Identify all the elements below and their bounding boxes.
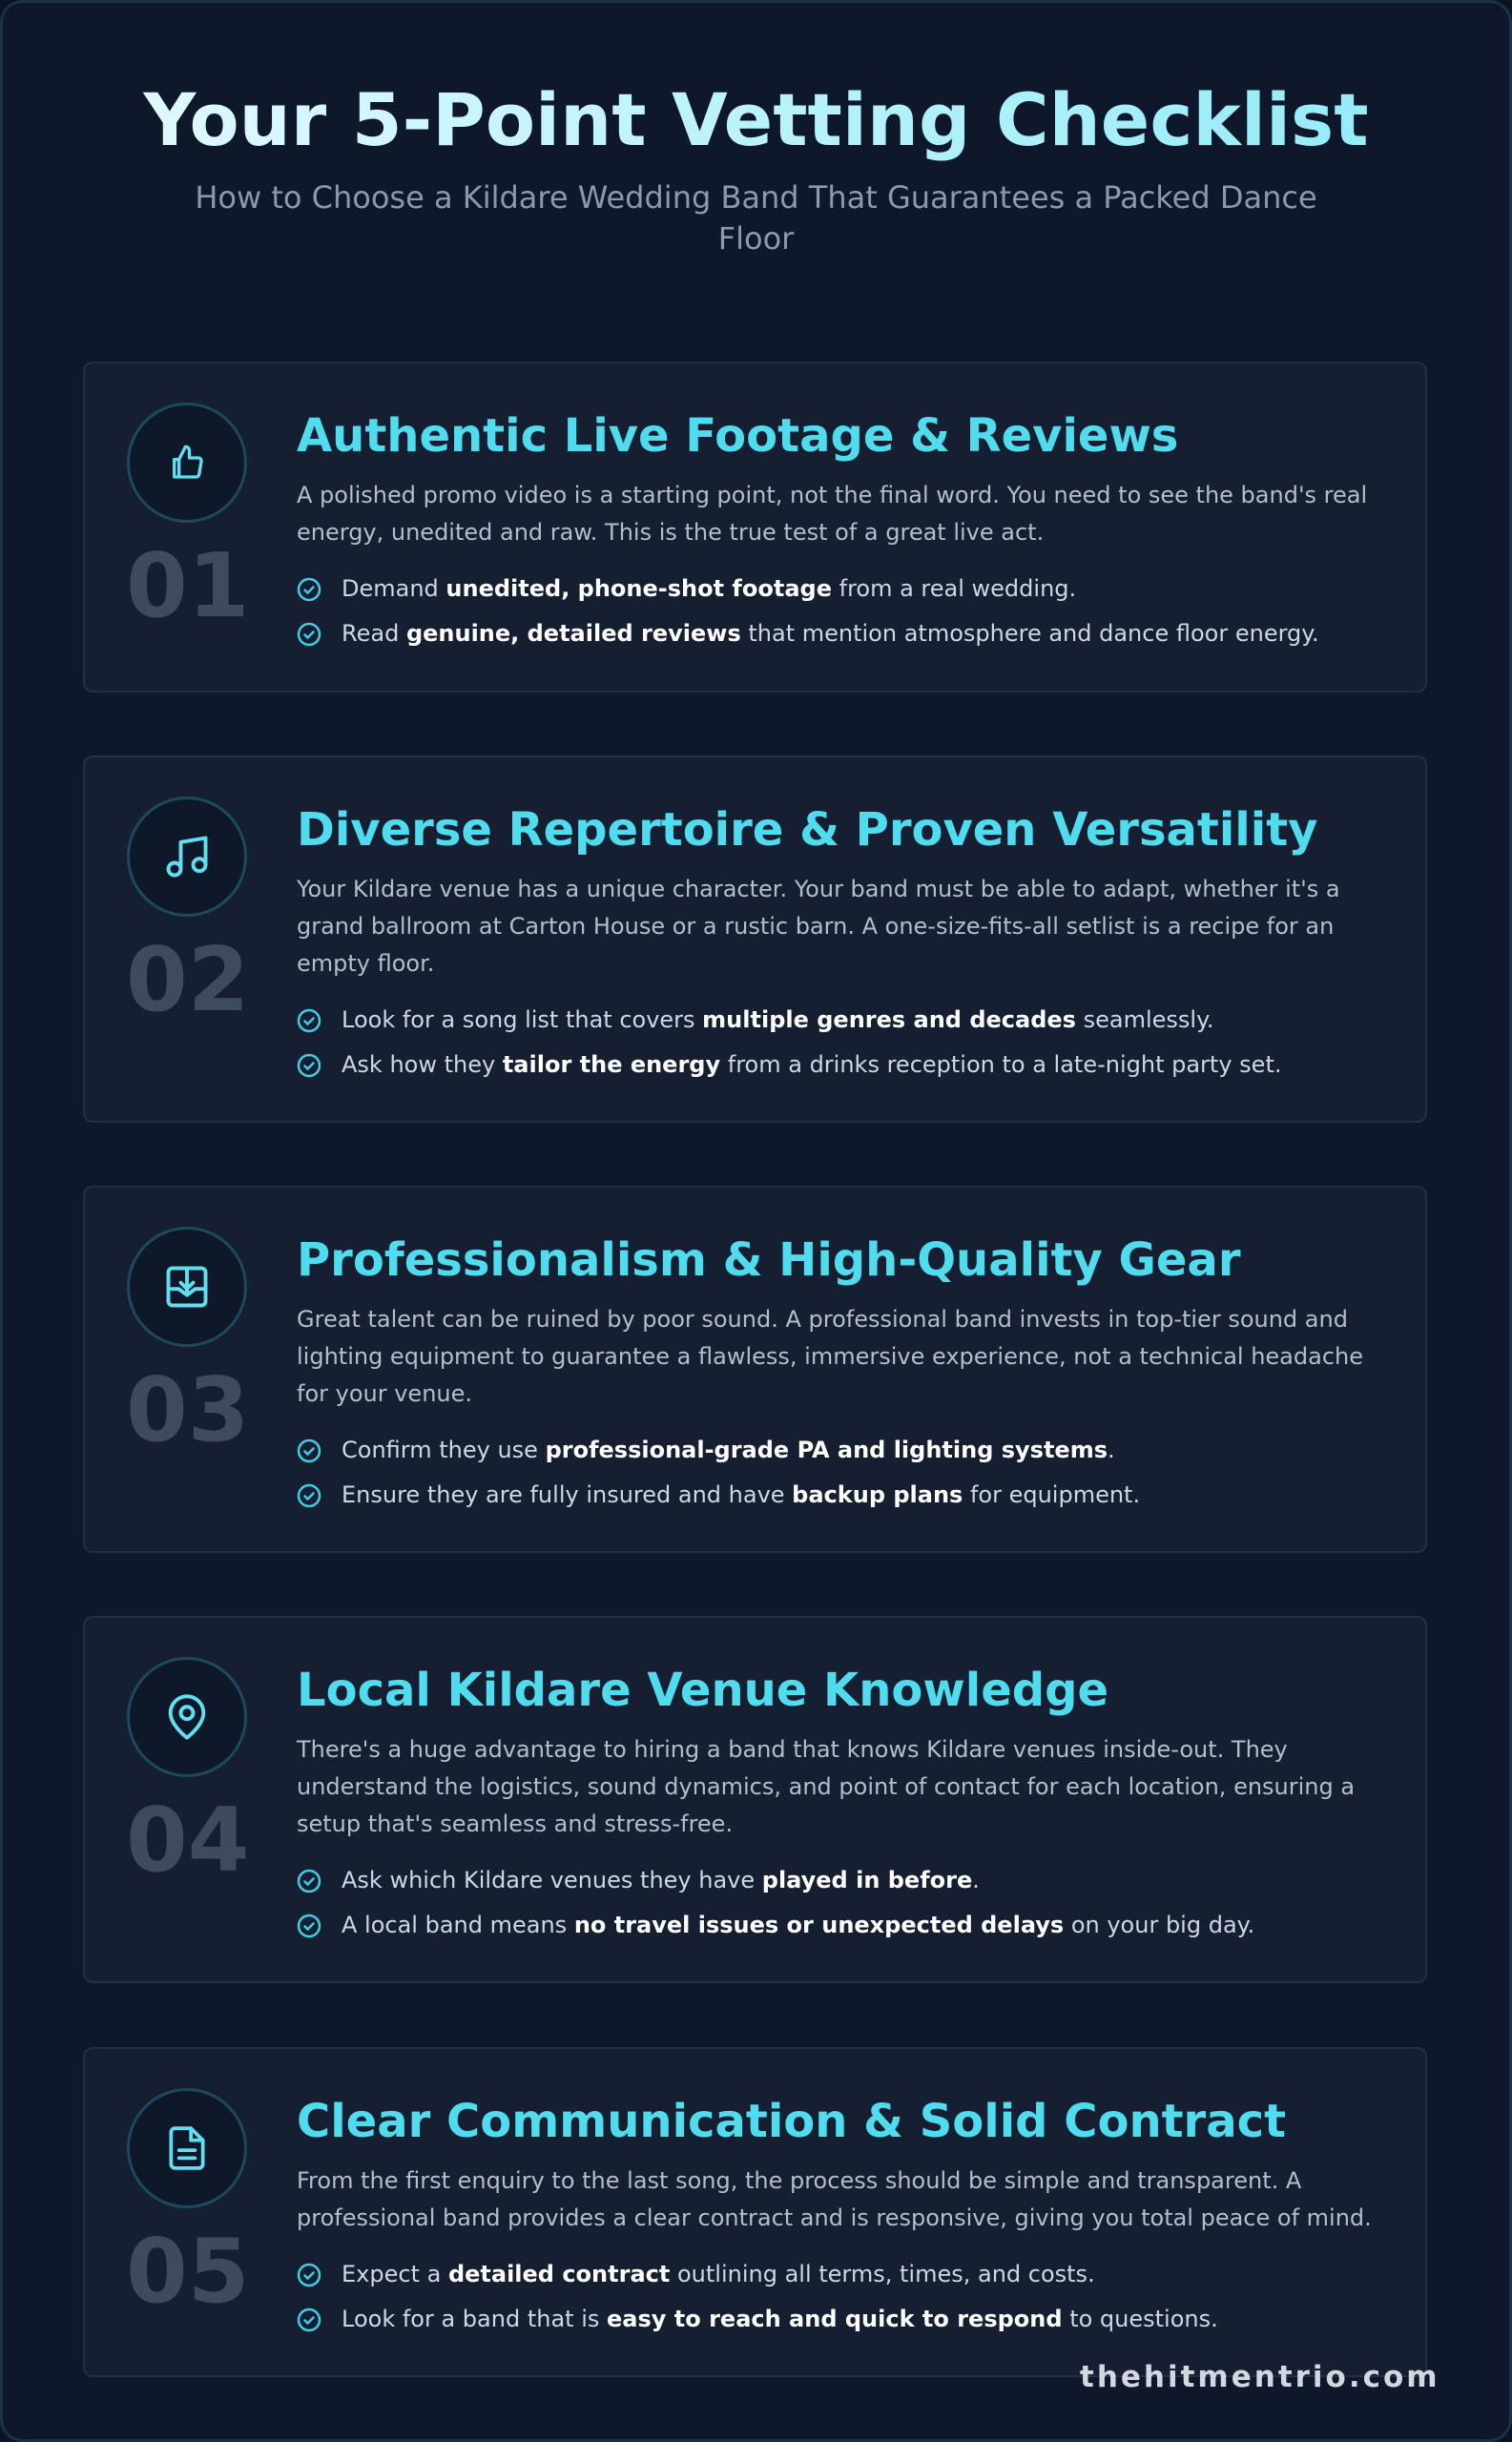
content: Clear Communication & Solid Contract — [297, 2095, 1286, 2148]
icon: music note — [127, 797, 247, 917]
number 05: 05 — [126, 2220, 249, 2323]
panel: card 2 — [83, 755, 1427, 1123]
number 03: 03 — [126, 1358, 249, 1461]
content — [297, 1233, 1363, 1508]
content: Diverse Repertoire & Proven Versatility — [297, 803, 1317, 857]
number 02: 02 — [126, 928, 249, 1031]
watermark: thehitmentrio.com — [1080, 2360, 1440, 2394]
number 04: 04 — [126, 1789, 249, 1892]
icon: equipment box — [127, 1227, 247, 1347]
panel: card 1 — [83, 362, 1427, 693]
content — [297, 2095, 1372, 2332]
icon: map pin — [127, 1657, 247, 1777]
content: Ensure they are fully insured and have backup plans for equipment. — [342, 1481, 1140, 1508]
content: Authentic Live Footage & Reviews — [297, 409, 1178, 463]
content: There's a huge advantage to hiring a band that knows Kildare venues inside-out. They understand the logistics, sound dynamics, and point of contact for each location, ensuring a setup that's seamless and stress-free. — [297, 1736, 1355, 1837]
content: Look for a band that is easy to reach and quick to respond to questions. — [342, 2306, 1218, 2332]
content: Your Kildare venue has a unique character. Your band must be able to adapt, whether it's a grand ballroom at Carton House or a rustic barn. A one-size-fits-all setlist is a recipe for an empty floor. — [297, 876, 1340, 977]
content: Demand unedited, phone-shot footage from a real wedding. — [342, 575, 1076, 602]
content: A local band means no travel issues or unexpected delays on your big day. — [342, 1912, 1254, 1938]
content: Ask which Kildare venues they have played in before. — [342, 1867, 980, 1894]
icon: document — [127, 2088, 247, 2208]
content: Look for a song list that covers multiple genres and decades seamlessly. — [342, 1006, 1213, 1033]
title: Your 5-Point Vetting Checklist — [143, 77, 1369, 162]
content: Great talent can be ruined by poor sound. A professional band invests in top-tier sound and lighting equipment to guarantee a flawless, immersive experience, not a technical headache for your venue. — [297, 1306, 1363, 1407]
number 01: 01 — [126, 534, 249, 637]
content: From the first enquiry to the last song, the process should be simple and transparent. A professional band provides a clear contract and is responsive, giving you total peace of mind. — [297, 2167, 1372, 2231]
subtitle: How to Choose a Kildare Wedding Band That Guarantees a Packed Dance Floor — [195, 179, 1317, 257]
content: Professionalism & High-Quality Gear — [297, 1233, 1240, 1287]
content: Ask how they tailor the energy from a drinks reception to a late-night party set. — [342, 1051, 1281, 1078]
content — [297, 803, 1340, 1078]
panel: card 5 — [83, 2047, 1427, 2377]
content: Local Kildare Venue Knowledge — [297, 1664, 1108, 1717]
content — [297, 409, 1367, 647]
icon: thumbs up — [127, 403, 247, 523]
content: Read genuine, detailed reviews that mention atmosphere and dance floor energy. — [342, 620, 1319, 647]
content — [296, 1664, 1355, 1938]
content: Confirm they use professional-grade PA and lighting systems. — [342, 1437, 1115, 1463]
panel: card 3 — [83, 1186, 1427, 1553]
content: A polished promo video is a starting point, not the final word. You need to see the band's real energy, unedited and raw. This is the true test of a great live act. — [297, 482, 1367, 546]
panel: card 4 — [83, 1616, 1427, 1983]
content: Expect a detailed contract outlining all terms, times, and costs. — [342, 2261, 1095, 2287]
